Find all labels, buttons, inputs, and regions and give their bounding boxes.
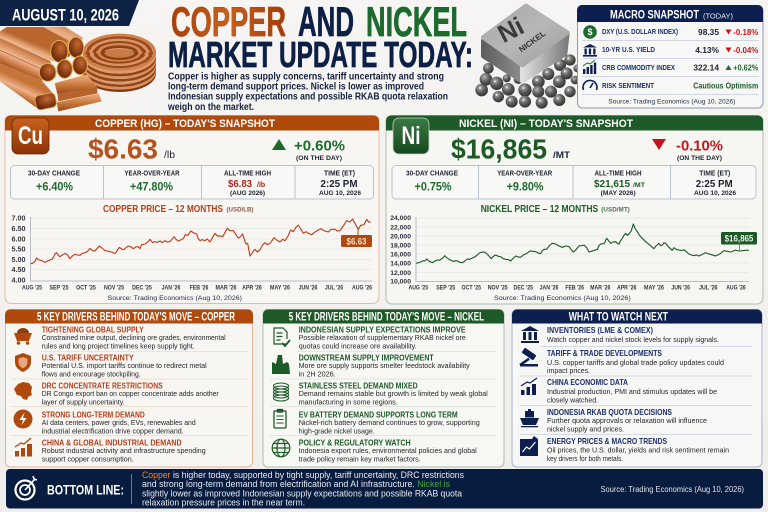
icon: ship	[520, 409, 539, 427]
row: DXY: 98.35	[698, 27, 719, 37]
item: downstream: DOWNSTREAM SUPPLY IMPROVEMENT	[299, 352, 434, 362]
item: DRC	[42, 380, 219, 406]
stat: all-time high: /lb	[257, 182, 265, 189]
stat: all-time high	[594, 168, 646, 197]
heading: 5 KEY DRIVERS BEHIND TODAY'S MOVE – NICKEL	[289, 311, 484, 323]
line chart: copper price: 4.50	[12, 265, 26, 274]
stat: time: TIME (ET)	[324, 168, 356, 177]
item: DRC: DRC CONCENTRATE RESTRICTIONS	[42, 380, 163, 390]
icon: dollar	[583, 25, 597, 39]
row: yield	[602, 45, 758, 55]
intro text	[167, 72, 448, 113]
line chart: copper price: AUG '25	[22, 284, 42, 292]
line chart: copper price: JAN '26	[162, 284, 181, 292]
item: demand: AI data centers, power grids, EVs, renewables and	[42, 418, 196, 427]
date banner	[0, 0, 139, 26]
row: risk: RISK SENTIMENT	[602, 81, 654, 90]
item: EV battery: EV BATTERY DEMAND SUPPORTS LONG TERM	[299, 409, 458, 419]
line chart: nickel price: 18,000	[390, 242, 411, 249]
item: tightening supply	[42, 324, 226, 350]
callout: copper price	[341, 235, 372, 247]
line chart: copper price: MAR '26	[216, 284, 237, 292]
bottom line heading: BOTTOM LINE:	[47, 482, 124, 498]
line chart: nickel price: AUG '25	[409, 284, 428, 292]
stat: all-time high: (MAY 2026)	[601, 190, 636, 197]
line chart: copper price: NOV '25	[104, 284, 124, 292]
copper price: $6.63	[88, 134, 158, 164]
item: EV battery	[299, 409, 480, 435]
stat: year over year	[497, 168, 553, 194]
item: Indonesian supply: Possible relaxation of supplementary RKAB nickel ore	[299, 333, 466, 342]
row: DXY: -0.18%	[733, 28, 758, 37]
line chart: nickel price: 24,000	[390, 215, 411, 222]
line chart: nickel price: AUG '26	[726, 284, 746, 292]
line chart: nickel price: APR '26	[617, 284, 637, 292]
row: yield: -0.04%	[733, 46, 758, 55]
line chart: nickel price: 22,000	[390, 224, 411, 231]
bottom line text	[142, 470, 464, 509]
image: copper pipes and coil	[0, 27, 155, 111]
item: Indonesian supply	[299, 324, 466, 350]
item: tariff: U.S. TARIFF UNCERTAINTY	[42, 352, 134, 362]
icon: battery clipboard	[274, 410, 286, 428]
line chart: copper price: 6.00	[12, 234, 26, 243]
bottom line text: and strong long-term demand from electrification and AI infrastructure. Nickel is	[142, 479, 450, 490]
bottom line text: slightly lower as improved Indonesian supply expectations and possible RKAB quota	[142, 488, 463, 499]
image: nickel block and pellets: NICKEL	[517, 29, 547, 54]
stat: all-time high: ALL-TIME HIGH	[224, 168, 271, 177]
stat: time: AUG 10, 2026	[694, 190, 736, 197]
icon: dollar: $	[587, 27, 593, 37]
item: downstream: More ore supply supports smelter feedstock availability	[299, 361, 470, 370]
icon: Cu badge: Cu	[18, 122, 43, 150]
copper chart title: (USD/LB)	[226, 206, 254, 214]
line chart: nickel price: OCT '25	[462, 284, 481, 292]
item: china data: Industrial production, PMI and stimulus updates will be	[547, 387, 717, 396]
stat: time: TIME (ET)	[699, 168, 731, 177]
line chart: copper price: AUG '26	[352, 284, 372, 292]
callout: copper price: $6.63	[346, 236, 367, 246]
icon: Ni badge	[393, 118, 429, 154]
line chart: copper price: 5.00	[12, 255, 26, 264]
line chart: copper price	[12, 214, 372, 292]
row: DXY: DXY (U.S. DOLLAR INDEX)	[602, 27, 678, 36]
item: tightening supply: Constrained mine output, declining ore grades, environmental	[42, 333, 226, 342]
stat: all-time high: /MT	[633, 182, 646, 189]
line chart: copper price: 4.00	[12, 276, 26, 285]
image: nickel block and pellets	[475, 6, 581, 109]
nickel price: $16,865	[451, 134, 547, 164]
line chart: copper price: JUN '26	[299, 284, 318, 292]
panel: nickel snapshot	[386, 116, 763, 304]
icon: Cu badge	[12, 118, 49, 154]
nickel heading: NICKEL (NI) – TODAY'S SNAPSHOT	[459, 118, 633, 130]
line chart: copper price: 6.50	[12, 224, 26, 233]
stat: all-time high: (AUG 2026)	[230, 190, 265, 197]
item: stainless: Demand remains stable but growth is limited by weak global	[299, 389, 488, 398]
panel: bottom line	[6, 469, 763, 509]
item: tightening supply: TIGHTENING GLOBAL SUPPLY	[42, 324, 144, 334]
stat: time	[694, 168, 736, 197]
panel: macro snapshot	[577, 5, 763, 108]
item: tariff: TARIFF & TRADE DEVELOPMENTS	[547, 348, 662, 358]
stat: 30-day: +0.75%	[414, 182, 452, 194]
item: EV battery: high-grade nickel usage.	[299, 426, 375, 435]
stat: all-time high: $6.83	[228, 178, 252, 190]
stat: time: 2:25 PM	[696, 178, 733, 190]
stat: 30-day: 30-DAY CHANGE	[406, 168, 458, 177]
line chart: nickel price: 12,000	[390, 270, 411, 277]
item: policy: POLICY & REGULATORY WATCH	[299, 437, 411, 447]
line chart: copper price: 5.50	[12, 245, 26, 254]
intro text: Indonesian supply expectations and possible RKAB quota relaxation	[168, 92, 448, 103]
line chart: nickel price: SEP '25	[436, 284, 455, 292]
item: policy: Indonesia export rules, environmental policies and global	[299, 446, 477, 455]
title: MARKET UPDATE TODAY:	[168, 34, 473, 75]
row: DXY	[602, 27, 758, 37]
line chart: nickel price: JUN '26	[671, 284, 690, 292]
callout: nickel price: $16,865	[725, 234, 753, 244]
item: stainless: STAINLESS STEEL DEMAND MIXED	[299, 380, 418, 390]
line chart: nickel price	[390, 215, 757, 292]
nickel chart title: (USD/MT)	[601, 206, 630, 214]
item: china data	[547, 377, 717, 404]
panel: nickel drivers	[263, 310, 504, 467]
line chart: copper price: FEB '26	[190, 284, 209, 292]
item: tariff: Potential U.S. import tariffs continue to redirect metal	[42, 361, 207, 370]
item: downstream: in 2H 2026.	[299, 369, 336, 378]
line chart: nickel price: FEB '26	[565, 284, 584, 292]
title	[168, 0, 473, 75]
row: CRB: 322.14	[693, 62, 719, 72]
row: yield: 4.13%	[695, 45, 720, 55]
icon: factory	[272, 355, 290, 374]
icon: globe	[272, 439, 290, 457]
panel: what to watch next	[512, 310, 762, 467]
stat: time: AUG 10, 2026	[319, 190, 361, 197]
line chart: nickel price: 14,000	[390, 260, 411, 267]
stat: all-time high	[224, 168, 271, 197]
item: policy	[299, 437, 477, 463]
icon: Ni badge: Ni	[402, 122, 420, 150]
line chart: nickel price: NOV '25	[488, 284, 508, 292]
icon: gauge	[583, 80, 597, 90]
line chart: copper price: 7.00	[12, 214, 26, 223]
item: tariff: impact prices.	[547, 366, 590, 375]
item: Indonesian supply: quotas could increase ore availability.	[299, 341, 417, 350]
copper heading: COPPER (HG) – TODAY'S SNAPSHOT	[95, 118, 275, 130]
stat: year over year: +9.80%	[506, 182, 544, 194]
copper daily change: +0.60%	[294, 137, 345, 154]
bottom line text: Copper is higher today, supported by tight supply, tariff uncertainty, DRC restrictions	[142, 470, 464, 481]
row: risk: Cautious Optimism	[693, 82, 758, 90]
stat: 30-day: 30-DAY CHANGE	[28, 168, 80, 177]
line chart: nickel price: 16,000	[390, 251, 411, 258]
icon: chart	[583, 60, 596, 74]
stat: time: 2:25 PM	[320, 178, 358, 190]
copper chart title: COPPER PRICE – 12 MONTHS	[103, 203, 223, 215]
item: DRC: layer of supply uncertainty.	[42, 397, 125, 406]
line chart: copper price: SEP '25	[50, 284, 69, 292]
copper daily change	[272, 137, 345, 162]
image: nickel block and pellets: Ni	[493, 12, 529, 49]
item: china data: closely watched.	[547, 396, 598, 404]
item: tightening supply: rules and long project timelines keep supply tight.	[42, 341, 195, 350]
row: risk	[602, 81, 758, 90]
item: tariff	[42, 352, 207, 378]
item: china: CHINA & GLOBAL INDUSTRIAL DEMAND	[42, 437, 182, 447]
item: energy: ENERGY PRICES & MACRO TRENDS	[547, 436, 667, 446]
row: CRB: +0.62%	[733, 63, 758, 72]
source: Source: Trading Economics (Aug 10, 2026)	[600, 485, 744, 494]
line chart: copper price: DEC '25	[132, 284, 152, 292]
line chart: copper price: APR '26	[242, 284, 262, 292]
row: yield: 10-YR U.S. YIELD	[602, 45, 656, 54]
item: inventories: Watch copper and nickel stock levels for supply signals.	[547, 335, 719, 344]
intro text: Copper is higher as supply concerns, tariff uncertainty and strong	[168, 72, 444, 82]
copper daily change: (ON THE DAY)	[296, 155, 342, 162]
icon: bank	[521, 326, 539, 343]
line chart: copper price: MAY '26	[270, 284, 290, 292]
nickel chart title: NICKEL PRICE – 12 MONTHS	[481, 203, 598, 215]
nickel source: Source: Trading Economics (Aug 10, 2026)	[494, 295, 631, 302]
item: demand	[42, 409, 196, 435]
item: demand: industrial electrification drive copper demand.	[42, 426, 184, 435]
intro text: weigh on the market.	[167, 102, 254, 113]
item: RKAB: Further quota approvals or relaxation will influence	[547, 416, 707, 425]
item: RKAB: nickel supply and prices.	[547, 424, 624, 434]
icon: bank	[583, 44, 597, 57]
item: china	[42, 437, 206, 463]
line chart: copper price: OCT '25	[76, 284, 96, 292]
line chart: nickel price: 10,000	[390, 278, 411, 285]
item: EV battery: Nickel-rich battery demand continues to grow, supporting	[299, 418, 480, 427]
copper source: Source: Trading Economics (Aug 10, 2026)	[108, 295, 242, 302]
heading: WHAT TO WATCH NEXT	[569, 311, 668, 323]
macro heading: (TODAY)	[703, 11, 733, 20]
heading: 5 KEY DRIVERS BEHIND TODAY'S MOVE – COPPER	[37, 311, 235, 323]
nickel stats box	[392, 166, 756, 199]
icon: trend box	[520, 436, 538, 456]
item: inventories: INVENTORIES (LME & COMEX)	[547, 325, 653, 335]
icon: shield	[15, 353, 31, 372]
bottom line text: relaxation pressure prices in the near term.	[142, 498, 305, 509]
line chart: nickel price: 20,000	[390, 233, 411, 240]
item: tariff	[547, 348, 724, 375]
icon: growth chart	[15, 438, 32, 456]
item: downstream	[299, 352, 470, 378]
item: energy: key drivers for both metals.	[547, 454, 623, 463]
intro text: long-term demand support prices. Nickel is lower as improved	[168, 82, 424, 92]
item: demand: STRONG LONG-TERM DEMAND	[42, 409, 145, 419]
panel: copper drivers	[5, 310, 253, 467]
date banner: AUGUST 10, 2026	[12, 6, 119, 24]
stat: all-time high: ALL-TIME HIGH	[594, 168, 642, 177]
panel: copper snapshot	[5, 116, 379, 304]
item: policy: trade policy remain key market factors.	[299, 454, 421, 463]
item: china data: CHINA ECONOMIC DATA	[547, 377, 628, 387]
line chart: nickel price: JUL '26	[699, 284, 718, 292]
icon: mine cart	[14, 328, 32, 345]
stat: time	[319, 168, 361, 197]
item: energy: Oil prices, the U.S. dollar, yields and risk sentiment remain	[547, 446, 729, 454]
icon: china data chart	[521, 378, 537, 395]
stat: 30-day	[406, 168, 458, 194]
line chart: nickel price: MAY '26	[644, 284, 664, 292]
item: RKAB	[547, 407, 707, 434]
icon: target	[16, 476, 37, 500]
icon: steel coil	[274, 383, 288, 401]
icon: gavel	[519, 348, 538, 366]
item: DRC: DR Congo export ban on copper concentrate adds another	[42, 389, 219, 398]
line chart: copper price: JUL '26	[325, 284, 343, 292]
icon: document check	[274, 328, 290, 346]
item: tariff: flows and encourage stockpiling.	[42, 369, 141, 378]
nickel daily change	[652, 137, 723, 162]
row: CRB	[602, 62, 758, 72]
stat: year over year: +47.80%	[130, 182, 173, 194]
item: tariff: U.S. copper tariffs and global trade policy updates could	[547, 358, 724, 367]
icon: DRC map	[14, 382, 32, 400]
stat: all-time high: $21,615	[594, 178, 630, 190]
nickel price: /MT	[553, 150, 571, 160]
row: CRB: CRB COMMODITY INDEX	[602, 63, 675, 72]
item: stainless: manufacturing in some regions.	[299, 397, 398, 406]
macro heading: MACRO SNAPSHOT	[610, 9, 699, 21]
item: stainless	[299, 380, 488, 406]
icon: lightning bolt	[14, 410, 32, 428]
stat: year over year: YEAR-OVER-YEAR	[124, 168, 180, 177]
source: Source: Trading Economics (Aug 10, 2026)	[608, 98, 735, 106]
copper price: /lb	[164, 149, 175, 161]
nickel daily change: (ON THE DAY)	[677, 155, 722, 162]
item: energy	[547, 436, 729, 463]
stat: year over year: YEAR-OVER-YEAR	[497, 168, 553, 177]
item: Indonesian supply: INDONESIAN SUPPLY EXPECTATIONS IMPROVE	[299, 324, 466, 334]
line chart: nickel price: DEC '25	[514, 284, 533, 292]
stat: 30-day	[28, 168, 80, 194]
copper stats box	[10, 166, 374, 199]
item: inventories	[547, 325, 719, 344]
nickel daily change: -0.10%	[676, 137, 723, 154]
line chart: nickel price: MAR '26	[590, 284, 611, 292]
item: RKAB: INDONESIA RKAB QUOTA DECISIONS	[547, 407, 672, 417]
stat: year over year	[124, 168, 180, 194]
stat: 30-day: +6.40%	[36, 182, 73, 194]
item: china: Robust industrial activity and infrastructure spending	[42, 446, 206, 455]
item: china: support copper consumption.	[42, 454, 134, 463]
line chart: nickel price: JAN '26	[540, 284, 559, 292]
